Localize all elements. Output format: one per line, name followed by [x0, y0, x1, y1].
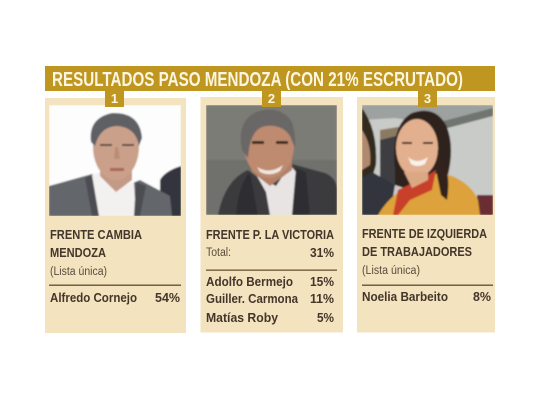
number tab 2 [262, 91, 281, 107]
note: lista única: (Lista única) [362, 265, 420, 277]
result row: Alfredo Cornejo 54%: 54% [155, 290, 180, 305]
heading: Frente de Izquierda de Trabajadores [362, 226, 488, 259]
heading: Frente P. La Victoria: FRENTE P. LA VICTORIA [206, 227, 335, 242]
result row: Matías Roby 5% [206, 310, 334, 325]
result row: Guiller. Carmona 11%: 11% [310, 291, 334, 306]
heading: Frente Cambia Mendoza [50, 227, 143, 260]
number tab 3: 3 [424, 91, 431, 106]
result row: Guiller. Carmona 11%: Guiller. Carmona [206, 291, 299, 306]
panel: Frente Cambia Mendoza [45, 98, 186, 333]
panel: Frente P. La Victoria [200, 97, 343, 332]
number tab 1: 1 [111, 91, 118, 106]
note: lista única: (Lista única) [50, 266, 107, 278]
number tab 1 [105, 91, 124, 107]
result row: Adolfo Bermejo 15%: 15% [310, 274, 334, 289]
result row: Noelia Barbeito 8%: Noelia Barbeito [362, 289, 448, 304]
heading: Frente Cambia Mendoza: FRENTE CAMBIA [50, 227, 143, 242]
photo: Alfredo Cornejo [49, 105, 181, 216]
photo: Noelia Barbeito [362, 105, 493, 215]
result row: Alfredo Cornejo 54%: Alfredo Cornejo [50, 290, 137, 305]
result row: Matías Roby 5%: Matías Roby [206, 310, 279, 325]
number tab 2: 2 [268, 91, 275, 106]
result row: total 31%: 31% [310, 245, 334, 260]
heading: Frente Cambia Mendoza: MENDOZA [50, 245, 107, 260]
result row: Matías Roby 5%: 5% [317, 310, 334, 325]
result row: total 31% [206, 245, 334, 260]
heading: Frente de Izquierda de Trabajadores: DE TRABAJADORES [362, 244, 472, 259]
result row: Noelia Barbeito 8%: 8% [473, 289, 491, 304]
heading: Frente de Izquierda de Trabajadores: FRENTE DE IZQUIERDA [362, 226, 488, 241]
result row: Adolfo Bermejo 15%: Adolfo Bermejo [206, 274, 293, 289]
panel: Frente de Izquierda de Trabajadores [357, 97, 495, 332]
number tab 3 [418, 91, 437, 107]
photo: Adolfo Bermejo [206, 105, 337, 215]
result row: total 31%: Total: [206, 247, 231, 259]
